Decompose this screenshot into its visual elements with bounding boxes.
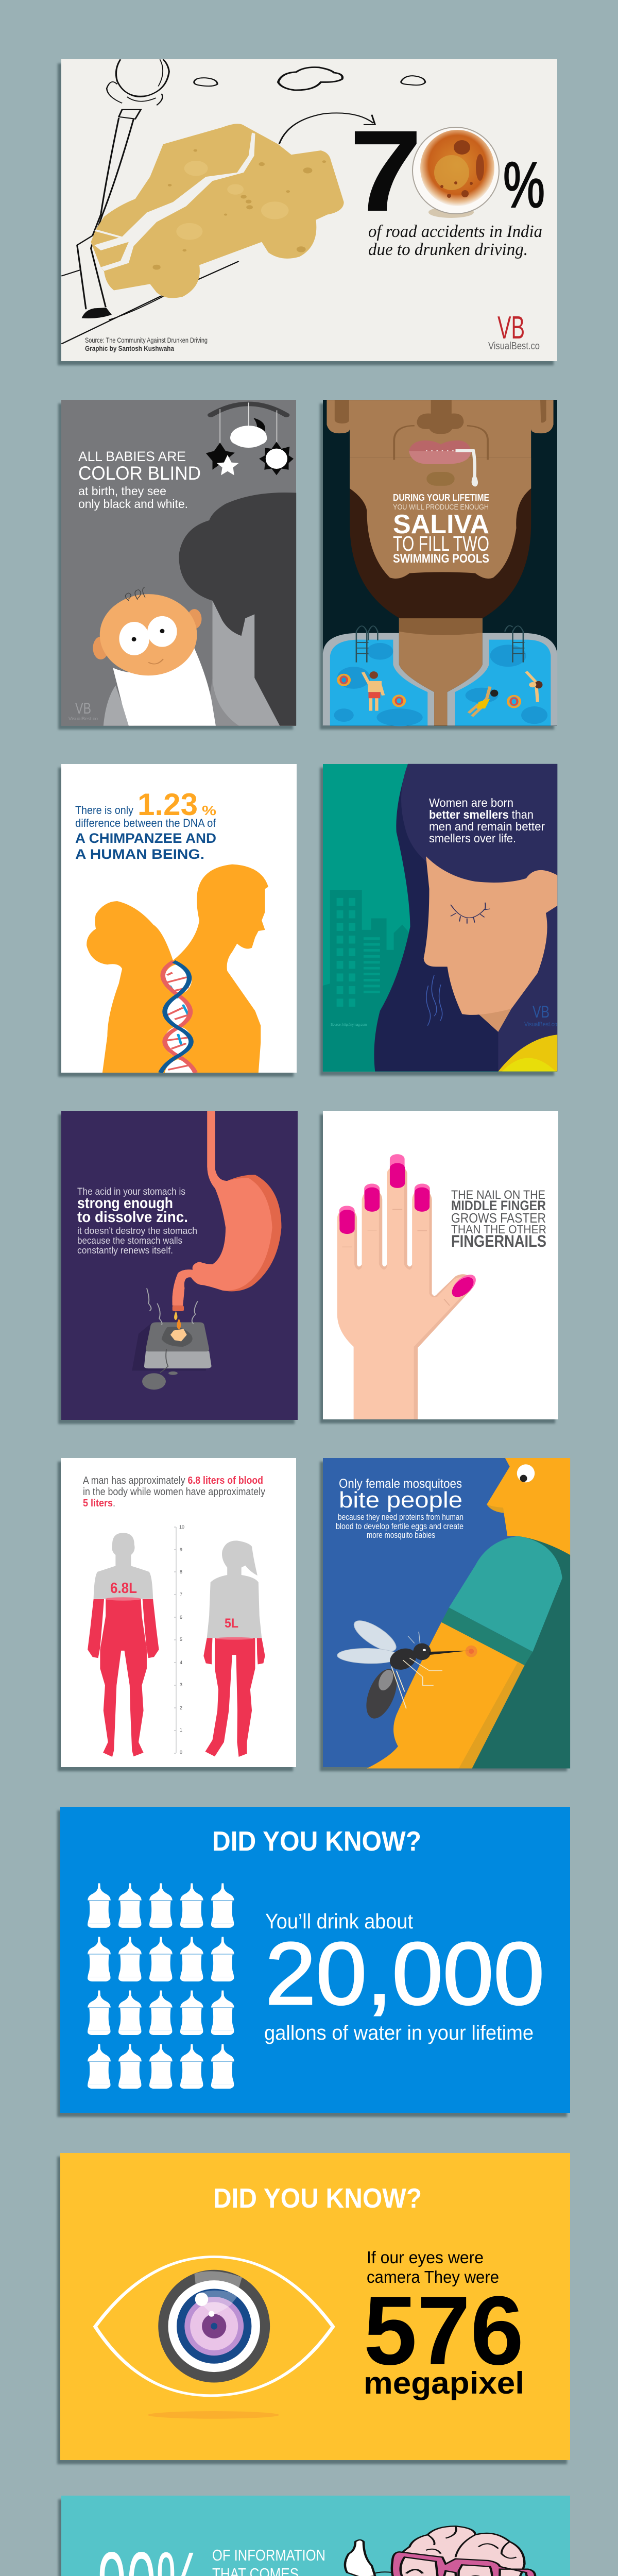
illustration: city skyline [323, 890, 409, 1072]
text: camera stat: 576 [364, 2276, 524, 2385]
text: acid fact: to dissolve zinc. [77, 1209, 188, 1226]
heading: at birth, they see [78, 484, 166, 498]
text: water stat: You’ll drink about [265, 1909, 414, 1933]
illustration: mother and baby [93, 493, 296, 726]
chart: litres scale: 4 [180, 1660, 182, 1665]
text: DNA fact: % [202, 803, 216, 818]
chart: litres scale: 8 [180, 1569, 182, 1574]
logo: VB watermark [68, 700, 98, 721]
text: acid fact: The acid in your stomach is [77, 1187, 185, 1197]
heading: only black and white. [78, 497, 188, 511]
source credit [85, 336, 208, 352]
chart: litres scale: 10 [179, 1524, 184, 1530]
illustration: DNA helix [161, 961, 195, 1073]
panel: middle finger nail [320, 1111, 558, 1423]
heading: COLOR BLIND [78, 463, 201, 484]
chart: litres scale [174, 1524, 184, 1755]
source note: Source: http://nymag.com [331, 1023, 367, 1027]
text: smell fact: Women are born [429, 796, 513, 809]
text: acid fact: strong enough [77, 1195, 173, 1212]
text: visual fact: OF INFORMATION [212, 2546, 325, 2564]
icon grid: bottles [88, 1883, 234, 2089]
text: blood fact: in the body while women have approximately [83, 1486, 265, 1498]
text: saliva fact: SWIMMING POOLS [393, 552, 489, 566]
text: mosquito fact: bite people [339, 1487, 462, 1513]
logo: VB watermark: VB [533, 1003, 550, 1021]
text: saliva fact: SALIVA [393, 510, 489, 539]
chart: male silhouette [88, 1533, 159, 1757]
text: smell fact: men and remain better [429, 820, 545, 833]
logo: VB watermark: VisualBest.co [524, 1021, 557, 1028]
logo: VB watermark: VisualBest.co [68, 716, 98, 721]
panel: eye megapixel [57, 2153, 570, 2464]
source credit: Source: The Community Against Drunken Driving [85, 336, 208, 344]
illustration: stomach [172, 1111, 281, 1320]
illustration: melting zinc block [132, 1288, 212, 1389]
text: mosquito fact: blood to develop fertile eggs and create [336, 1521, 464, 1531]
heading: DID YOU KNOW? [212, 1826, 421, 1857]
logo: VB watermark [524, 1003, 557, 1028]
text: water stat: 20,000 [265, 1924, 544, 2023]
text: water stat: gallons of water in your lifetime [264, 2022, 534, 2044]
text: camera stat: camera They were [367, 2267, 499, 2286]
panel: mosquitoes [320, 1458, 570, 1771]
chart: litres scale: 0 [180, 1750, 182, 1755]
caption: of road accidents in India [368, 222, 542, 241]
text: mosquito fact: more mosquito babies [367, 1530, 435, 1540]
text: mosquito fact: Only female mosquitoes [339, 1477, 462, 1491]
logo: VB [488, 310, 540, 352]
text: DNA fact: difference between the DNA of [75, 817, 216, 829]
chart: litres scale: 3 [180, 1682, 182, 1687]
swimmers [363, 671, 543, 716]
illustration: eye [95, 2257, 333, 2419]
logo: VB: VB [497, 310, 525, 346]
illustration: hand [337, 1154, 480, 1419]
panel: water bottles [57, 1807, 570, 2117]
text: mosquito fact: because they need proteins from human [338, 1512, 464, 1522]
text: camera stat: If our eyes were [367, 2248, 484, 2267]
text: DNA fact: There is only [75, 804, 133, 817]
text: visual fact [212, 2546, 325, 2576]
text: DNA fact [75, 787, 216, 862]
label: 6.8L: 6.8L [110, 1580, 137, 1597]
chart: litres scale: 6 [180, 1615, 182, 1620]
caption [368, 222, 542, 259]
chart: litres scale: 2 [180, 1705, 182, 1710]
chart: litres scale: 5 [180, 1637, 182, 1642]
chart: litres scale: 7 [180, 1592, 182, 1597]
text: DNA fact: A CHIMPANZEE AND [75, 831, 216, 846]
logo: VB: VisualBest.co [488, 341, 540, 352]
illustration: papad car [91, 124, 344, 298]
panel: drunken driving [58, 59, 557, 365]
text: acid fact: constantly renews itself. [77, 1245, 173, 1256]
label: 5L: 5L [225, 1616, 238, 1631]
illustration: woman profile [374, 764, 557, 1072]
text: DNA fact: 1.23 [138, 787, 198, 822]
heading: ALL BABIES ARE [78, 449, 186, 464]
text: saliva fact: DURING YOUR LIFETIME [393, 493, 489, 503]
text: saliva fact [393, 493, 489, 566]
text: saliva fact: TO FILL TWO [393, 532, 489, 555]
icon: beer glass as zero [413, 127, 499, 218]
panel: visual brain [58, 2496, 570, 2576]
illustration: lamp post, road and clouds [61, 59, 425, 344]
illustration: brain with glasses [345, 2526, 535, 2576]
big seven: 7 [349, 107, 422, 235]
heading [78, 449, 201, 511]
text: acid fact [77, 1187, 197, 1256]
illustration: bearded face [327, 400, 554, 726]
text: smell fact [429, 796, 545, 845]
text: blood fact [83, 1475, 265, 1509]
panel: blood volume [58, 1458, 296, 1771]
panel: women smellers [320, 764, 557, 1076]
chart: litres scale: 1 [180, 1727, 182, 1733]
panel: DNA chimpanzee [58, 764, 297, 1077]
text: acid fact: it doesn't destroy the stomach [77, 1226, 197, 1236]
panel: saliva [320, 400, 557, 730]
text: camera stat: megapixel [364, 2366, 524, 2400]
illustration: baby mobile [206, 402, 294, 475]
illustration: swimming pool [323, 625, 557, 726]
text: smell fact: better smellers than [429, 808, 534, 821]
text: saliva fact: YOU WILL PRODUCE ENOUGH [393, 503, 489, 512]
chart: female silhouette [203, 1540, 265, 1757]
text: fingernail fact: GROWS FASTER [451, 1210, 546, 1226]
percent sign: % [503, 149, 545, 221]
swim rings [338, 675, 520, 707]
caption: due to drunken driving. [368, 240, 528, 259]
text: blood fact: 5 liters. [83, 1498, 115, 1509]
source credit: Graphic by Santosh Kushwaha [85, 344, 174, 352]
illustration: person [367, 1458, 570, 1769]
text: acid fact: because the stomach walls [77, 1235, 182, 1246]
panel: babies colour blind [58, 400, 296, 730]
panel: stomach acid [58, 1111, 298, 1424]
illustration: silhouettes [87, 865, 268, 1073]
text: fingernail fact: THE NAIL ON THE [451, 1188, 545, 1202]
chart: litres scale: 9 [180, 1547, 182, 1552]
text: fingernail fact: THAN THE OTHER [451, 1223, 546, 1236]
text: fingernail fact: FINGERNAILS [451, 1232, 546, 1250]
heading: DID YOU KNOW? [213, 2183, 422, 2214]
text: fingernail fact: MIDDLE FINGER [451, 1198, 546, 1213]
text: smell fact: smellers over life. [429, 832, 516, 845]
text: fingernail fact [451, 1188, 546, 1250]
logo: VB watermark: VB [75, 700, 91, 717]
illustration: mosquito [337, 1617, 469, 1720]
text: DNA fact: A HUMAN BEING. [75, 846, 204, 862]
text: blood fact: A man has approximately 6.8 liters of blood [83, 1475, 263, 1486]
text: mosquito fact [336, 1477, 464, 1540]
